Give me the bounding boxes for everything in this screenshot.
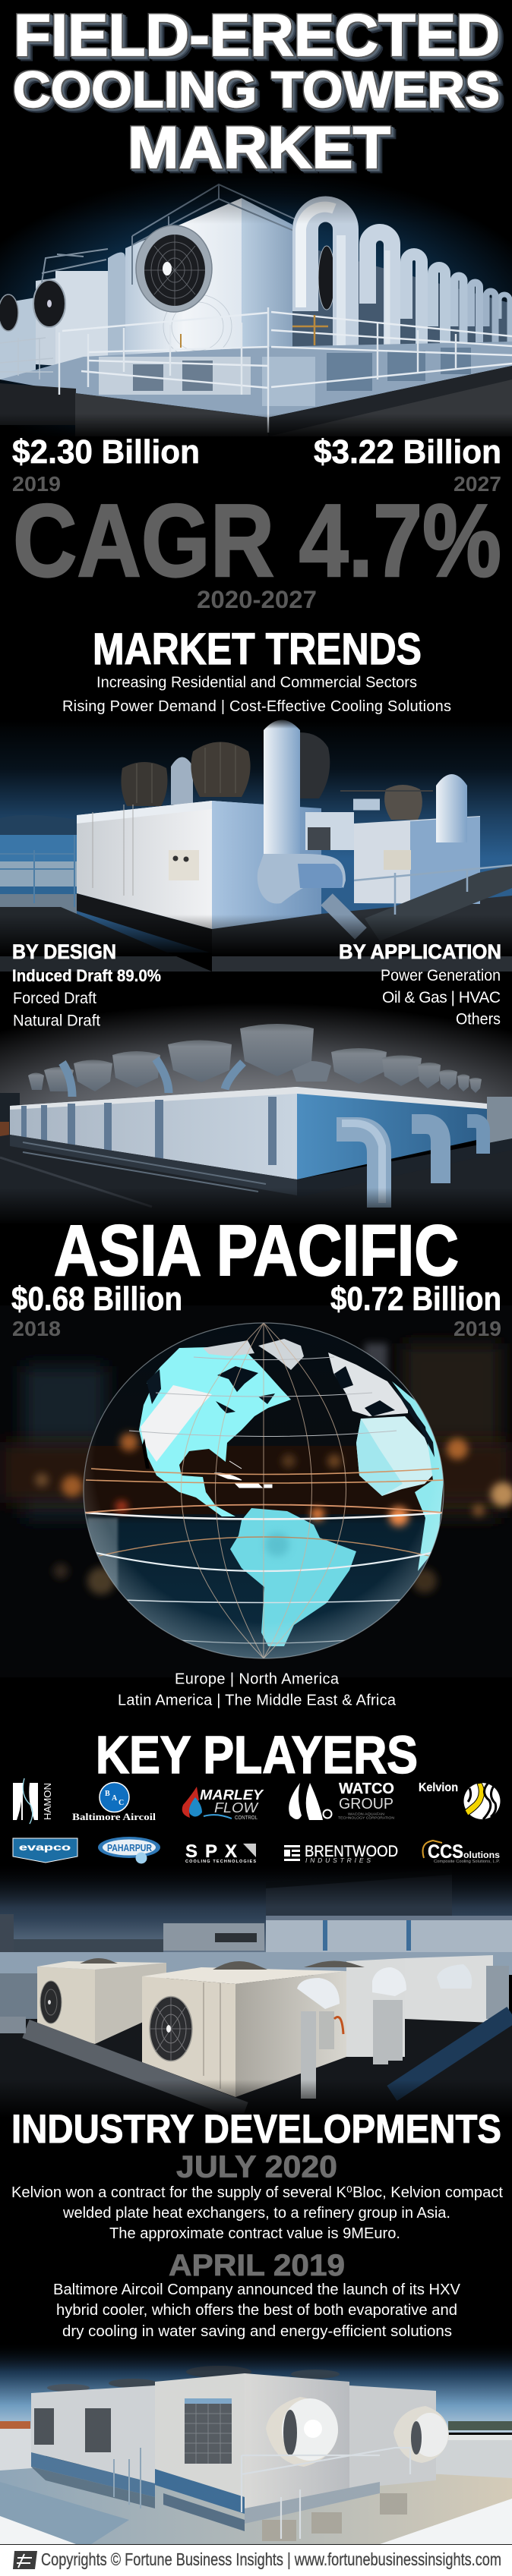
development: July 2020: welded plate heat exchangers, to a refinery group in Asia. (62, 2205, 450, 2222)
region: Africa (356, 1416, 438, 1496)
stat: Asia Pacific 2018 value: $0.68 Billion (11, 1280, 182, 1318)
logo: Baltimore Aircoil: Baltimore Aircoil (72, 1811, 156, 1822)
stat: 2019 market value: 2019 (12, 472, 61, 496)
icon: Fortune Business Insights logo (13, 2551, 37, 2569)
logo: Brentwood Industries: INDUSTRIES (305, 1856, 371, 1864)
icon: centrifugal fan housing (266, 2397, 338, 2467)
text: market trend list (62, 674, 451, 715)
icon: large tower fan (136, 225, 212, 312)
stat: 2019 market value (12, 433, 200, 496)
logo: Watco Group: GROUP (339, 1796, 393, 1812)
region: Greenland and Arctic islands (203, 1339, 304, 1370)
title: Field-Erected Cooling Towers Market: FIELD-ERECTED (14, 2, 500, 68)
panel: by application segment (339, 940, 501, 1028)
logo: Baltimore Aircoil: A (112, 1794, 118, 1803)
development: April 2019: APRIL 2019 (169, 2249, 345, 2282)
development: July 2020: The approximate contract value is 9MEuro. (109, 2225, 400, 2242)
stat: 2019 market value: $2.30 Billion (12, 433, 200, 471)
development: July 2020 (11, 2149, 503, 2242)
title: Field-Erected Cooling Towers Market: MARKET (128, 114, 390, 181)
logo: Watco Group: TECHNOLOGY CORPORATION (338, 1815, 394, 1820)
logo: Evapco (13, 1838, 77, 1863)
icon: vertical duct (264, 720, 300, 861)
heading: market trends: MARKET TRENDS (93, 625, 422, 674)
text: other regions: Europe | North America (175, 1671, 340, 1688)
development: July 2020: JULY 2020 (176, 2149, 337, 2184)
stat: Asia Pacific 2019 value (330, 1280, 501, 1340)
panel: by design segment: BY DESIGN (12, 940, 116, 963)
title: Field-Erected Cooling Towers Market (13, 2, 500, 181)
logo: Watco Group: WATCO (339, 1781, 394, 1797)
panel: by application segment: Others (456, 1011, 501, 1028)
logo: CCS Solutions: Composite Cooling Solutions, L.P. (434, 1860, 500, 1864)
heading: key players: KEY PLAYERS (96, 1725, 418, 1784)
image: rooftop hybrid coolers under a blue sky (0, 2341, 512, 2544)
stat: CAGR: 2020-2027 (197, 586, 317, 613)
icon: globe showing the Americas (84, 1322, 444, 1660)
logo: Baltimore Aircoil: C (119, 1799, 124, 1807)
region: Caribbean islands (214, 1461, 272, 1488)
logo: Evapco: evapco (19, 1842, 71, 1853)
logo: SPX Cooling Technologies: SPX (185, 1841, 237, 1862)
logo: CCS Solutions: CCS (428, 1841, 463, 1863)
icon: large elbow pipe (337, 1129, 379, 1208)
panel: by application segment: Oil & Gas | HVAC (382, 989, 501, 1006)
logo: CCS Solutions: olutions (463, 1850, 500, 1860)
logo: Watco Group: WACON AQUAFAN (348, 1812, 384, 1815)
stat: 2027 market value (314, 433, 501, 496)
panel: by design segment: Forced Draft (13, 990, 96, 1007)
development: April 2019: hybrid cooler, which offers the best of both evaporative and (56, 2302, 457, 2319)
development: April 2019 (53, 2249, 461, 2340)
logo: Hamon (13, 1778, 53, 1824)
panel: by design segment (12, 940, 161, 1029)
panel: by application segment: BY APPLICATION (339, 940, 501, 963)
region: North America (139, 1347, 291, 1516)
logo: Brentwood Industries (284, 1843, 398, 1864)
development: July 2020: Kelvion won a contract for the supply of several K⁰Bloc, Kelvion compact (11, 2184, 503, 2201)
logo: Kelvion (419, 1781, 500, 1819)
logo: Watco Group (289, 1781, 394, 1820)
logo: Paharpur (98, 1837, 160, 1864)
logos: key players (13, 1778, 500, 1864)
panel: by design segment: Induced Draft 89.0% (12, 966, 161, 985)
text: other regions: Latin America | The Middle East & Africa (118, 1693, 397, 1709)
logo: CCS Solutions (422, 1841, 500, 1864)
stat: Asia Pacific 2018 value: 2018 (12, 1317, 61, 1340)
icon: fan shrouds (121, 732, 422, 820)
region: Europe (328, 1353, 408, 1416)
logo: Baltimore Aircoil: B (105, 1790, 110, 1798)
logo: Hamon: HAMON (42, 1783, 53, 1820)
logo: Baltimore Aircoil (72, 1782, 156, 1822)
image: rooftop air handling units with ducts (0, 717, 512, 972)
stat: Asia Pacific 2019 value: 2019 (454, 1317, 501, 1340)
icon: rear unit fan (40, 1981, 62, 2023)
logo: Marley Flow Control: MARLEY (200, 1787, 264, 1803)
text: market trend list: Increasing Residential and Commercial Sectors (96, 674, 417, 691)
panel: by design segment: Natural Draft (13, 1012, 100, 1029)
development: April 2019: dry cooling in water saving and energy-efficient solutions (62, 2323, 452, 2340)
image: rooftop cooling block with bowl vents and pipes (0, 979, 512, 1226)
stat: 2027 market value: 2027 (454, 472, 501, 496)
logo: Brentwood Industries: BRENTWOOD (305, 1843, 398, 1860)
stat: 2027 market value: $3.22 Billion (314, 433, 501, 471)
logo: Marley Flow Control: CONTROL (235, 1815, 258, 1821)
logo: Kelvion: Kelvion (419, 1781, 458, 1794)
logo: Marley Flow Control (182, 1787, 264, 1821)
stat: Asia Pacific 2018 value (11, 1280, 182, 1340)
region: South America (230, 1508, 356, 1646)
logo: Marley Flow Control: FLOW (214, 1800, 259, 1815)
icon: front unit fan (150, 1996, 192, 2061)
image: cooling tower row with fans and arched pipes (0, 171, 512, 440)
logo: SPX Cooling Technologies (185, 1841, 256, 1864)
development: April 2019: Baltimore Aircoil Company announced the launch of its HXV (53, 2282, 461, 2298)
logo: SPX Cooling Technologies: COOLING TECHNOLOGIES (185, 1860, 256, 1864)
text: market trend list: Rising Power Demand | Cost-Effective Cooling Solutions (62, 698, 451, 715)
image: blurred city lights behind globe (0, 1305, 512, 1677)
title: Field-Erected Cooling Towers Market: COOLING TOWERS (13, 61, 500, 118)
image: rooftop condenser units with pipes (0, 1866, 512, 2118)
logo: Paharpur: PAHARPUR (107, 1843, 152, 1853)
text: other regions (118, 1671, 397, 1709)
footer: copyright bar (0, 2544, 512, 2576)
panel: by application segment: Power Generation (381, 967, 501, 984)
